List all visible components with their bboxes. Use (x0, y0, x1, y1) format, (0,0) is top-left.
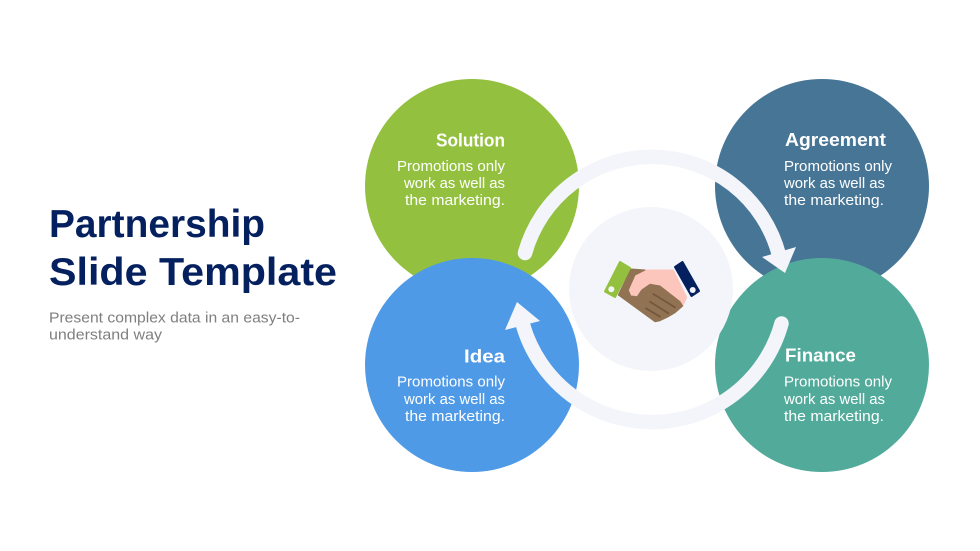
text: agreement: Agreement (785, 129, 886, 150)
text: finance: the marketing. (784, 409, 884, 425)
text: finance: work as well as (783, 392, 885, 408)
text: solution: Solution (436, 130, 505, 150)
text: finance: Finance (785, 344, 856, 366)
subtitle text: understand way (49, 328, 163, 344)
circle: agreement (715, 79, 929, 293)
circle: finance (715, 258, 929, 472)
text: solution: work as well as (403, 176, 505, 192)
text: finance (783, 344, 893, 425)
text: agreement: the marketing. (784, 193, 884, 209)
circle: idea (365, 258, 579, 472)
circle: solution (365, 79, 579, 293)
icon: handshake (605, 262, 699, 322)
text: solution: Promotions only (397, 159, 506, 175)
center circle (569, 207, 733, 371)
text: idea: Idea (464, 346, 506, 366)
text: idea: work as well as (403, 392, 505, 408)
text: finance: Promotions only (784, 374, 893, 390)
title (49, 203, 337, 294)
text: idea: the marketing. (405, 409, 505, 425)
subtitle text (49, 310, 300, 344)
subtitle text: Present complex data in an easy-to- (49, 310, 300, 326)
arrow: bottom arc from finance to idea (505, 302, 782, 422)
text: solution (397, 130, 506, 209)
title: Partnership (49, 203, 265, 246)
text: idea (397, 346, 506, 425)
text: idea: Promotions only (397, 374, 506, 390)
text: agreement (783, 129, 893, 209)
title: Slide Template (49, 251, 337, 294)
arrow: top arc from solution to finance (525, 157, 796, 273)
text: solution: the marketing. (405, 193, 505, 209)
text: agreement: Promotions only (784, 159, 893, 175)
text: agreement: work as well as (783, 176, 885, 192)
